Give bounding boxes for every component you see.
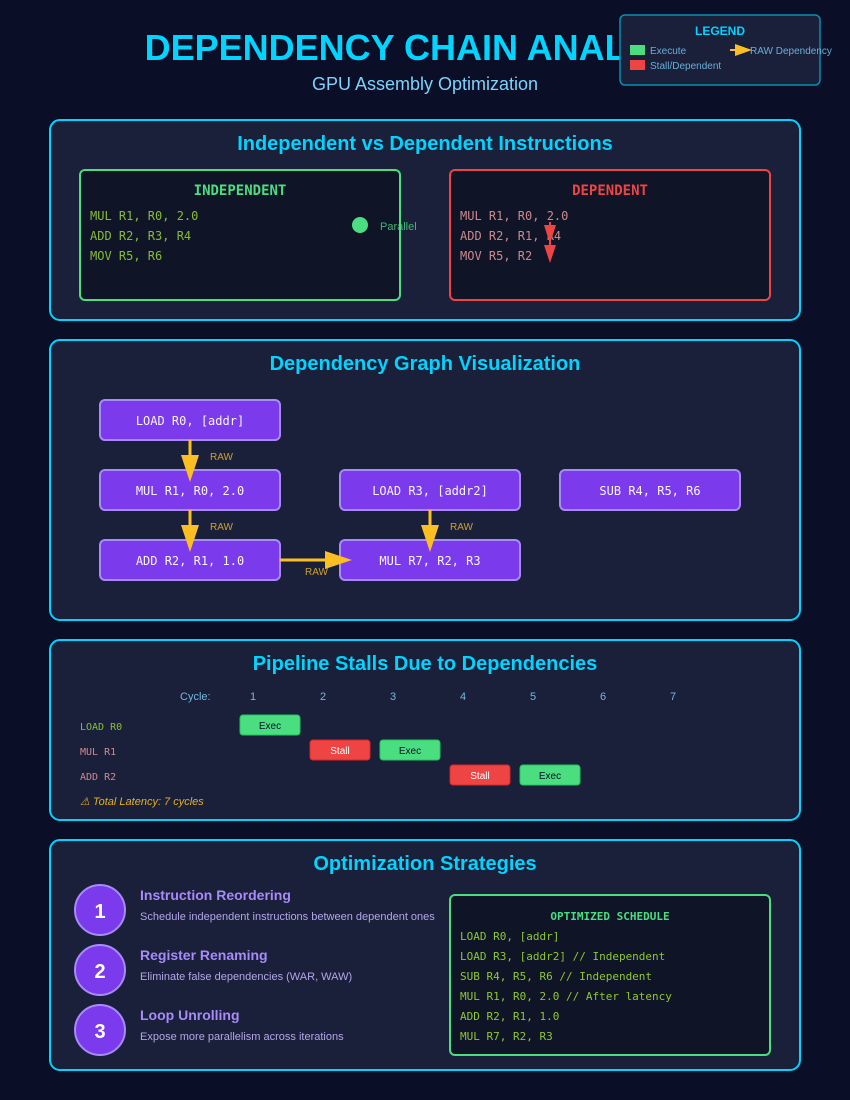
node: add r2 <box>100 540 280 580</box>
arrow: load r0 to mul r1: RAW <box>210 452 234 463</box>
cycle header: 7 <box>670 691 676 703</box>
cycle header: 5 <box>530 691 536 703</box>
optimized schedule: MUL R1, R0, 2.0 // After latency <box>460 990 672 1003</box>
heading: Pipeline Stalls Due to Dependencies <box>253 653 597 675</box>
strategy 3: Expose more parallelism across iterations <box>140 1031 344 1043</box>
heading: Dependency Graph Visualization <box>270 353 580 375</box>
row: load r0: Exec <box>259 721 281 732</box>
panel: pipeline stalls <box>50 640 800 820</box>
dependent box <box>450 170 770 300</box>
strategy 3: Loop Unrolling <box>140 1007 240 1023</box>
legend: Stall/Dependent <box>650 61 721 72</box>
cycle header: 4 <box>460 691 466 703</box>
legend: Execute <box>650 46 687 57</box>
row: add r2: Stall <box>470 771 490 782</box>
strategy 2 <box>75 945 352 995</box>
arrows: dependency <box>544 222 556 263</box>
optimized schedule: ADD R2, R1, 1.0 <box>460 1010 559 1023</box>
independent box: INDEPENDENT <box>194 183 286 199</box>
arrow: add r2 to mul r7 <box>280 551 352 578</box>
arrow: mul r1 to add r2 <box>181 510 234 552</box>
node: mul r7: MUL R7, R2, R3 <box>379 554 481 568</box>
row: add r2 <box>80 765 580 785</box>
independent box <box>80 170 400 300</box>
strategy 2: 2 <box>94 961 106 983</box>
panel: dependency graph <box>50 340 800 620</box>
dependent box: MOV R5, R2 <box>460 249 532 263</box>
strategy 2: Register Renaming <box>140 947 268 963</box>
independent box: MOV R5, R6 <box>90 249 162 263</box>
node: mul r1: MUL R1, R0, 2.0 <box>136 484 244 498</box>
strategy 3: 3 <box>94 1021 106 1043</box>
legend <box>620 15 832 85</box>
parallel indicator: Parallel <box>380 221 417 233</box>
legend: RAW Dependency <box>750 46 832 57</box>
row: mul r1 <box>80 740 440 760</box>
heading: Optimization Strategies <box>313 853 537 875</box>
arrow: load r0 to mul r1 <box>181 440 234 482</box>
heading: Independent vs Dependent Instructions <box>237 133 613 155</box>
optimized schedule: LOAD R3, [addr2] // Independent <box>460 950 665 963</box>
node: mul r1 <box>100 470 280 510</box>
row: load r0: LOAD R0 <box>80 722 122 733</box>
cycle header: 3 <box>390 691 396 703</box>
optimized schedule: MUL R7, R2, R3 <box>460 1030 553 1043</box>
node: load r0 <box>100 400 280 440</box>
latency note: ⚠ Total Latency: 7 cycles <box>80 796 204 808</box>
legend: LEGEND <box>695 24 745 38</box>
independent box: MUL R1, R0, 2.0 <box>90 209 198 223</box>
arrow: load r3 to mul r7 <box>421 510 474 552</box>
row: add r2: ADD R2 <box>80 772 116 783</box>
title: DEPENDENCY CHAIN ANALYSIS <box>145 27 705 68</box>
strategy 1 <box>75 885 435 935</box>
cycle header: Cycle: <box>180 691 211 703</box>
strategy 1: Schedule independent instructions between dependent ones <box>140 911 435 923</box>
optimized schedule: LOAD R0, [addr] <box>460 930 559 943</box>
optimized schedule <box>450 895 770 1055</box>
node: load r3: LOAD R3, [addr2] <box>372 484 488 498</box>
cycle header: 2 <box>320 691 326 703</box>
row: add r2: Exec <box>539 771 561 782</box>
dependent box: ADD R2, R1, R4 <box>460 229 561 243</box>
cycle header: 1 <box>250 691 256 703</box>
optimized schedule: OPTIMIZED SCHEDULE <box>550 910 670 923</box>
dependent box: DEPENDENT <box>572 183 648 199</box>
arrow: add r2 to mul r7: RAW <box>305 567 329 578</box>
row: load r0 <box>80 715 300 735</box>
row: mul r1: Exec <box>399 746 421 757</box>
dependent box: MUL R1, R0, 2.0 <box>460 209 568 223</box>
arrow: load r3 to mul r7: RAW <box>450 522 474 533</box>
subtitle: GPU Assembly Optimization <box>312 74 538 94</box>
node: sub r4 <box>560 470 740 510</box>
node: add r2: ADD R2, R1, 1.0 <box>136 554 244 568</box>
node: load r0: LOAD R0, [addr] <box>136 414 244 428</box>
row: mul r1: MUL R1 <box>80 747 116 758</box>
optimized schedule: SUB R4, R5, R6 // Independent <box>460 970 652 983</box>
cycle header: 6 <box>600 691 606 703</box>
strategy 1: 1 <box>94 901 106 923</box>
node: sub r4: SUB R4, R5, R6 <box>599 484 701 498</box>
arrow: mul r1 to add r2: RAW <box>210 522 234 533</box>
strategy 2: Eliminate false dependencies (WAR, WAW) <box>140 971 352 983</box>
panel: independent vs dependent <box>50 120 800 320</box>
independent box: ADD R2, R3, R4 <box>90 229 191 243</box>
node: load r3 <box>340 470 520 510</box>
strategy 3 <box>75 1005 344 1055</box>
panel: optimization strategies <box>50 840 800 1070</box>
cycle header <box>180 691 676 703</box>
strategy 1: Instruction Reordering <box>140 887 291 903</box>
row: mul r1: Stall <box>330 746 350 757</box>
node: mul r7 <box>340 540 520 580</box>
parallel indicator <box>352 217 417 233</box>
